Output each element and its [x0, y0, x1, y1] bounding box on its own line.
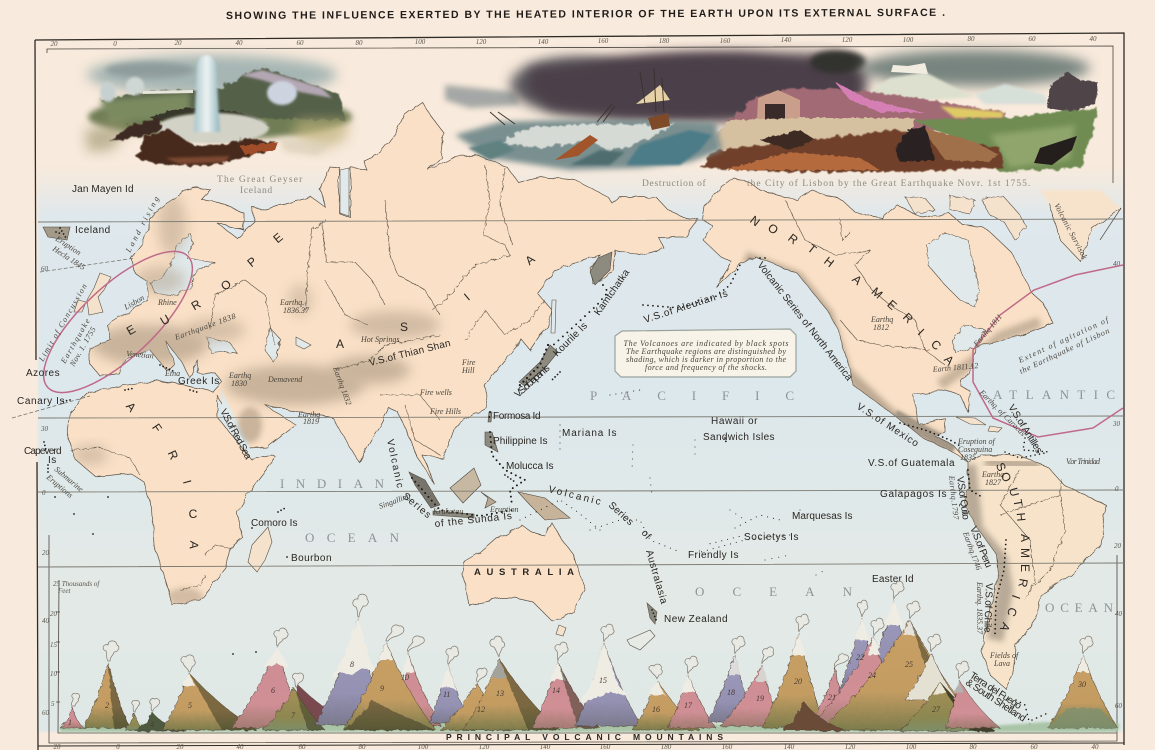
earthquake shading — [72, 195, 1040, 640]
label: Africa: F — [149, 421, 165, 435]
italic notes: earthquakes and eruptions: Eruption — [489, 505, 518, 514]
label: Africa: I — [180, 479, 194, 485]
italic notes: earthquakes and eruptions: Coseguina — [958, 445, 992, 454]
label: South America: I — [1009, 593, 1023, 601]
degree labels: 20 — [50, 40, 58, 48]
island and volcanic series labels: Azores — [26, 368, 60, 379]
water: inland seas and gulfs — [150, 168, 985, 450]
height scale: Feet — [57, 587, 71, 595]
mountain numbers: 4 — [150, 720, 154, 729]
italic notes: earthquakes and eruptions: 1835 — [960, 453, 976, 462]
label: North America: R — [900, 310, 916, 326]
mountain numbers: 25 — [905, 660, 913, 669]
label: North America: C — [928, 337, 944, 353]
italic notes: earthquakes and eruptions: Nov. 1. 1755 — [67, 325, 98, 369]
island and volcanic series labels: V.S.of Mexico — [854, 401, 921, 450]
label: North America: H — [821, 254, 837, 270]
mountain numbers: 21 — [828, 693, 836, 702]
label: South America: T — [1010, 498, 1026, 508]
degree labels: 60 — [41, 265, 48, 273]
mountain numbers: 16 — [652, 705, 660, 714]
italic notes: earthquakes and eruptions: 1830 — [231, 379, 247, 388]
island and volcanic series labels: Volcanic — [384, 438, 405, 490]
degree labels: 30 — [1112, 420, 1120, 428]
mountain numbers: 19 — [756, 694, 764, 703]
mountain numbers: 13 — [496, 689, 504, 698]
label: Australia: AUSTRALIA — [474, 567, 574, 578]
degree labels: 60 — [1028, 35, 1036, 43]
island and volcanic series labels: Volcanic Series of North America — [755, 260, 854, 383]
italic notes: earthquakes and eruptions: 1827 — [985, 478, 1002, 487]
degree labels: 20 — [1114, 542, 1122, 550]
island and volcanic series labels: V.S.of Red Sea — [217, 407, 253, 462]
label: South America: A — [1018, 534, 1032, 542]
title subtitle: SHOWING THE INFLUENCE EXERTED BY THE HEATED INTERIOR OF THE EARTH UPON ITS EXTERNAL SURFACE . — [226, 7, 946, 22]
degree labels: 0 — [113, 40, 117, 48]
land: islands — [74, 195, 1026, 650]
italic notes: earthquakes and eruptions: Krakatau — [432, 507, 463, 516]
island and volcanic series labels: Terra del Fuego — [967, 670, 1024, 712]
degree labels: 140 — [538, 38, 549, 46]
italic notes: earthquakes and eruptions: Rhine — [157, 298, 177, 307]
island and volcanic series labels: Is — [48, 455, 57, 466]
island and volcanic series labels: Marquesas Is — [792, 511, 853, 522]
mountain numbers: 2 — [105, 701, 109, 710]
label: North America: A — [941, 352, 957, 368]
degree labels: 40 — [1115, 610, 1122, 618]
ocean names — [280, 387, 1115, 615]
island and volcanic series labels: Capeverd — [24, 446, 62, 457]
mountain base ground — [60, 722, 1120, 732]
mountain numbers: 27 — [932, 705, 941, 714]
label: Europe: E — [124, 322, 138, 338]
mountain numbers — [68, 653, 1086, 729]
island and volcanic series labels: Australasia — [643, 549, 669, 606]
land: Eurasia and Africa — [67, 102, 699, 605]
italic notes: earthquakes and eruptions: Earthq 1832 — [331, 365, 353, 406]
land: North America — [703, 178, 1053, 462]
island and volcanic series labels: Galapagos Is — [880, 489, 947, 500]
mountain numbers: 17 — [684, 701, 693, 710]
degree labels: 120 — [842, 36, 853, 44]
degree labels: 140 — [781, 36, 792, 44]
italic notes: earthquakes and eruptions: 1819 — [303, 417, 319, 426]
label: North America: E — [884, 297, 900, 313]
italic notes: earthquakes and eruptions: 1812 — [873, 323, 889, 332]
ocean names: OCEAN — [1045, 600, 1114, 615]
label: North America: M — [869, 284, 885, 302]
label: North America: R — [785, 231, 801, 247]
island and volcanic series labels: New Zealand — [664, 614, 728, 625]
italic notes: earthquakes and eruptions: Volcanic Sarvisok — [1052, 202, 1089, 261]
ellipse: Lisbon earthquake region — [23, 230, 213, 414]
label: Asia: I — [461, 291, 473, 303]
height scale: 10 — [50, 670, 58, 678]
italic notes: earthquakes and eruptions: Earthq — [981, 470, 1004, 479]
italic notes: earthquakes and eruptions: Earthq. of Caracas — [977, 387, 1027, 438]
mountain numbers: 20 — [794, 677, 802, 686]
island and volcanic series labels: Molucca Is — [506, 461, 554, 472]
mountain numbers: 1 — [68, 718, 72, 727]
mountain numbers: 7 — [291, 711, 296, 720]
continent names — [123, 213, 1032, 634]
mountain numbers: 15 — [599, 676, 607, 685]
italic notes: earthquakes and eruptions: Fields of — [989, 651, 1020, 660]
label: North America: A — [849, 272, 865, 288]
italic notes: earthquakes and eruptions — [36, 195, 1111, 668]
degree labels: 60 — [1115, 702, 1122, 710]
label: South America: S — [993, 460, 1009, 474]
label: Asia: A — [522, 252, 538, 268]
island and volcanic series labels: V.S.of Peru — [967, 525, 994, 570]
degree labels: 40 — [1090, 35, 1097, 43]
degree labels: 40 — [236, 39, 243, 47]
mountain numbers: 8 — [350, 660, 354, 669]
italic notes: earthquakes and eruptions: Fire wells — [419, 388, 452, 397]
label: South America: C — [1004, 606, 1020, 619]
label: Africa — [123, 399, 201, 550]
land: South America — [964, 455, 1106, 688]
degree labels: 20 — [42, 549, 50, 557]
italic notes: earthquakes and eruptions: Land rising — [123, 195, 161, 255]
degree labels: 120 — [476, 38, 487, 46]
degree labels: 100 — [903, 36, 914, 44]
vignette: Destruction of Lisbon — [445, 50, 1098, 172]
island and volcanic series labels: of — [639, 528, 653, 542]
island arcs: grey islands of Indonesia, Japan and Kamchatka — [43, 227, 612, 520]
island and volcanic series labels: V.S.of Aleutian Is — [643, 288, 730, 326]
italic notes: earthquakes and eruptions: Demavend — [267, 375, 303, 384]
island and volcanic series labels: Friendly Is — [688, 550, 739, 561]
height scale: 25 Thousands of — [53, 580, 100, 588]
mountain numbers: 9 — [380, 684, 384, 693]
volcano chains: black spots — [44, 228, 1050, 725]
island and volcanic series labels: V.S.of Guatemala — [868, 458, 955, 469]
caption: The Great Geyser: Iceland — [240, 186, 273, 196]
label: South America: O — [998, 470, 1014, 484]
label: South America — [993, 460, 1032, 634]
label: Europe: U — [158, 312, 172, 328]
degree labels: 20 — [174, 39, 182, 47]
legend box: The Volcanoes are indicated by black spots — [624, 339, 788, 348]
italic notes: earthquakes and eruptions: Extent of agitation of — [1016, 314, 1111, 365]
label: South America: M — [1018, 548, 1032, 558]
ocean names: OCEAN — [695, 584, 853, 599]
degree labels: 160 — [598, 37, 609, 45]
mountain numbers: 22 — [856, 653, 864, 662]
italic notes: earthquakes and eruptions: Hot Springs — [360, 335, 399, 344]
ocean names: OCEAN — [305, 530, 400, 545]
island and volcanic series labels: V.S.of Japan Is — [513, 363, 553, 400]
mountain numbers: 18 — [727, 688, 735, 697]
island and volcanic series labels: Bourbon — [291, 553, 332, 564]
italic notes: earthquakes and eruptions: Eruption of — [957, 437, 996, 446]
degree labels: 40 — [1113, 260, 1120, 268]
volcano smoke plumes — [71, 581, 1093, 712]
caption: Destruction of Lisbon: the City of Lisbon by the Great Earthquake Novr. 1st 1755. — [747, 178, 1031, 189]
legend box: shading, which is darker in proportion to the — [626, 355, 786, 364]
legend box: The Earthquake regions are distinguished by — [626, 347, 786, 356]
island and volcanic series labels: Canary Is — [17, 396, 65, 407]
degree labels: 60 — [296, 39, 304, 47]
mountain numbers: 6 — [271, 686, 275, 695]
island and volcanic series labels: & South Shetland — [963, 677, 1028, 725]
italic notes: earthquakes and eruptions: Earth 1811.12 — [931, 361, 979, 374]
italic notes: earthquakes and eruptions: the Earthquake of Lisbon — [1018, 326, 1111, 376]
chart caption: PRINCIPAL VOLCANIC MOUNTAINS — [446, 732, 723, 742]
height scale: 20 — [50, 610, 58, 618]
island and volcanic series labels: Formosa Id — [493, 411, 541, 422]
island and volcanic series labels: Hawaii or — [711, 416, 758, 427]
vignette: The Great Geyser, Iceland — [85, 55, 352, 166]
map land masses — [67, 102, 1121, 688]
italic notes: earthquakes and eruptions: V.or Trinidad — [1066, 457, 1101, 466]
island and volcanic series labels: Iceland — [75, 225, 111, 236]
mountain numbers: 14 — [552, 686, 560, 695]
island and volcanic series labels: V.S.of Antilles — [1005, 403, 1044, 456]
italic notes: earthquakes and eruptions: Fire — [461, 358, 476, 367]
label: Europe: P — [244, 254, 260, 270]
principal volcanic mountains — [60, 581, 1120, 742]
island and volcanic series labels: V.S.of Thian Shan — [368, 338, 452, 369]
italic notes: earthquakes and eruptions: Eruptions — [44, 472, 75, 500]
label: Africa: C — [189, 507, 198, 521]
curve: extent of agitation — [973, 265, 1123, 437]
degree labels: 30 — [40, 425, 48, 433]
island and volcanic series labels: Comoro Is — [251, 518, 298, 529]
ocean — [38, 165, 1124, 732]
degree labels: 0 — [42, 489, 46, 497]
italic notes: earthquakes and eruptions: Earthq.1746 — [961, 530, 983, 571]
italic notes: earthquakes and eruptions: Fire Hills — [429, 407, 461, 416]
label: Europe — [124, 230, 286, 338]
land: Australia — [463, 523, 585, 621]
label: South America: U — [1006, 486, 1022, 498]
label: Europe: E — [270, 230, 286, 246]
label: Asia: S — [400, 320, 408, 334]
italic notes: earthquakes and eruptions: Earthq 1811 — [971, 312, 1004, 349]
italic notes: earthquakes and eruptions: Hill — [461, 366, 475, 375]
label: North America: T — [805, 241, 820, 257]
degree labels: 80 — [356, 39, 363, 47]
island and volcanic series labels: V.S.of Quito — [954, 476, 971, 521]
degree labels: 80 — [968, 35, 975, 43]
italic notes: earthquakes and eruptions: Earthq — [870, 315, 893, 324]
label: Africa: R — [165, 448, 181, 462]
italic notes: earthquakes and eruptions: Earthq.1797 — [947, 474, 961, 521]
label: South America: A — [997, 620, 1013, 634]
legend box: force and frequency of the shocks. — [645, 363, 767, 372]
label: Asia — [336, 252, 538, 351]
italic notes: earthquakes and eruptions: Etna — [164, 369, 180, 378]
label: Europe: R — [189, 297, 204, 313]
italic notes: earthquakes and eruptions: Earthquake 1838 — [173, 312, 237, 342]
label: North America — [747, 213, 957, 368]
ocean names: INDIAN — [280, 476, 385, 491]
island and volcanic series labels: Societys Is — [744, 532, 799, 543]
island and volcanic series labels: Sandwich Isles — [703, 432, 775, 443]
italic notes: earthquakes and eruptions: Hecla 1845 — [50, 244, 87, 272]
island and volcanic series labels: Easter Id — [872, 574, 914, 585]
rivers and borders — [70, 165, 1065, 600]
island and volcanic series labels: Kamtchatka — [592, 267, 632, 318]
ocean names: ATLANTIC — [993, 387, 1115, 402]
caption: The Great Geyser: The Great Geyser — [217, 175, 303, 185]
italic notes: earthquakes and eruptions: Singalling — [378, 491, 412, 511]
italic notes: earthquakes and eruptions: Earthq — [228, 371, 251, 380]
island and volcanic series labels: Series — [606, 500, 636, 528]
italic notes: earthquakes and eruptions: Submarine — [53, 465, 85, 494]
island and volcanic series labels: Series — [400, 491, 433, 521]
italic notes: earthquakes and eruptions: Greek Is — [178, 376, 220, 387]
island and volcanic series labels: Kourile Is — [551, 320, 590, 359]
height scale — [50, 580, 100, 708]
mountain numbers: 10 — [401, 673, 409, 682]
italic notes: earthquakes and eruptions: Earthquake — [58, 317, 92, 366]
caption: Destruction of Lisbon — [642, 178, 1031, 189]
italic notes: earthquakes and eruptions: Eruption — [53, 234, 83, 257]
italic notes: earthquakes and eruptions: Lisbon — [122, 293, 146, 312]
degree labels: 0 — [1115, 485, 1119, 493]
degree labels: 180 — [659, 37, 670, 45]
italic notes: earthquakes and eruptions: Earthq. 1835.37 — [975, 581, 984, 635]
label: South America: E — [1018, 564, 1032, 572]
label: Europe: O — [218, 277, 234, 293]
label: South America: H — [1014, 512, 1028, 522]
italic notes: earthquakes and eruptions: Limit of Concussion — [36, 282, 89, 364]
legend box — [615, 329, 796, 377]
degree labels: 40 — [42, 617, 50, 625]
degree labels: 60 — [42, 709, 50, 717]
mountain numbers: 5 — [188, 701, 192, 710]
italic notes: earthquakes and eruptions: Lava — [993, 659, 1010, 668]
mountains — [60, 600, 1118, 731]
caption: Destruction of Lisbon: Destruction of — [642, 178, 707, 189]
island and volcanic series labels: Jan Mayen Id — [72, 184, 134, 195]
label: South America: R — [1015, 578, 1031, 589]
mountain numbers: 12 — [477, 705, 485, 714]
island and volcanic series labels: of the Sunda Is — [434, 511, 513, 530]
italic notes: earthquakes and eruptions: Venetian — [126, 349, 154, 360]
italic notes: earthquakes and eruptions: 1836.37 — [283, 306, 310, 315]
mountain numbers: 11 — [443, 690, 450, 699]
caption: The Great Geyser — [217, 175, 303, 196]
degree labels: 100 — [415, 38, 426, 46]
label: Africa: A — [187, 540, 201, 550]
island and volcanic series labels: Philippine Is — [493, 436, 548, 447]
label: Africa: A — [123, 399, 139, 415]
degree labels: 160 — [720, 37, 731, 45]
island and volcanic series labels: V.S.of Chile — [981, 583, 994, 633]
mountain numbers: 30 — [1077, 680, 1086, 689]
label: North America: O — [765, 221, 781, 237]
mountain numbers: 24 — [868, 671, 876, 680]
height scale: 5 — [51, 700, 55, 708]
ocean names: PACIFIC — [590, 388, 794, 403]
island and volcanic series labels: Mariana Is — [562, 428, 617, 439]
italic notes: earthquakes and eruptions: Earthq — [297, 410, 320, 419]
italic notes: earthquakes and eruptions: Earthq. — [279, 298, 304, 307]
land: Greenland — [1040, 190, 1121, 262]
island and volcanic series labels: Volcanic — [547, 484, 602, 508]
label: Asia: A — [336, 337, 344, 351]
island and volcanic series labels — [17, 184, 1044, 725]
label: North America: I — [915, 326, 927, 338]
label: North America: N — [747, 213, 763, 229]
height scale: 15 — [50, 641, 58, 649]
